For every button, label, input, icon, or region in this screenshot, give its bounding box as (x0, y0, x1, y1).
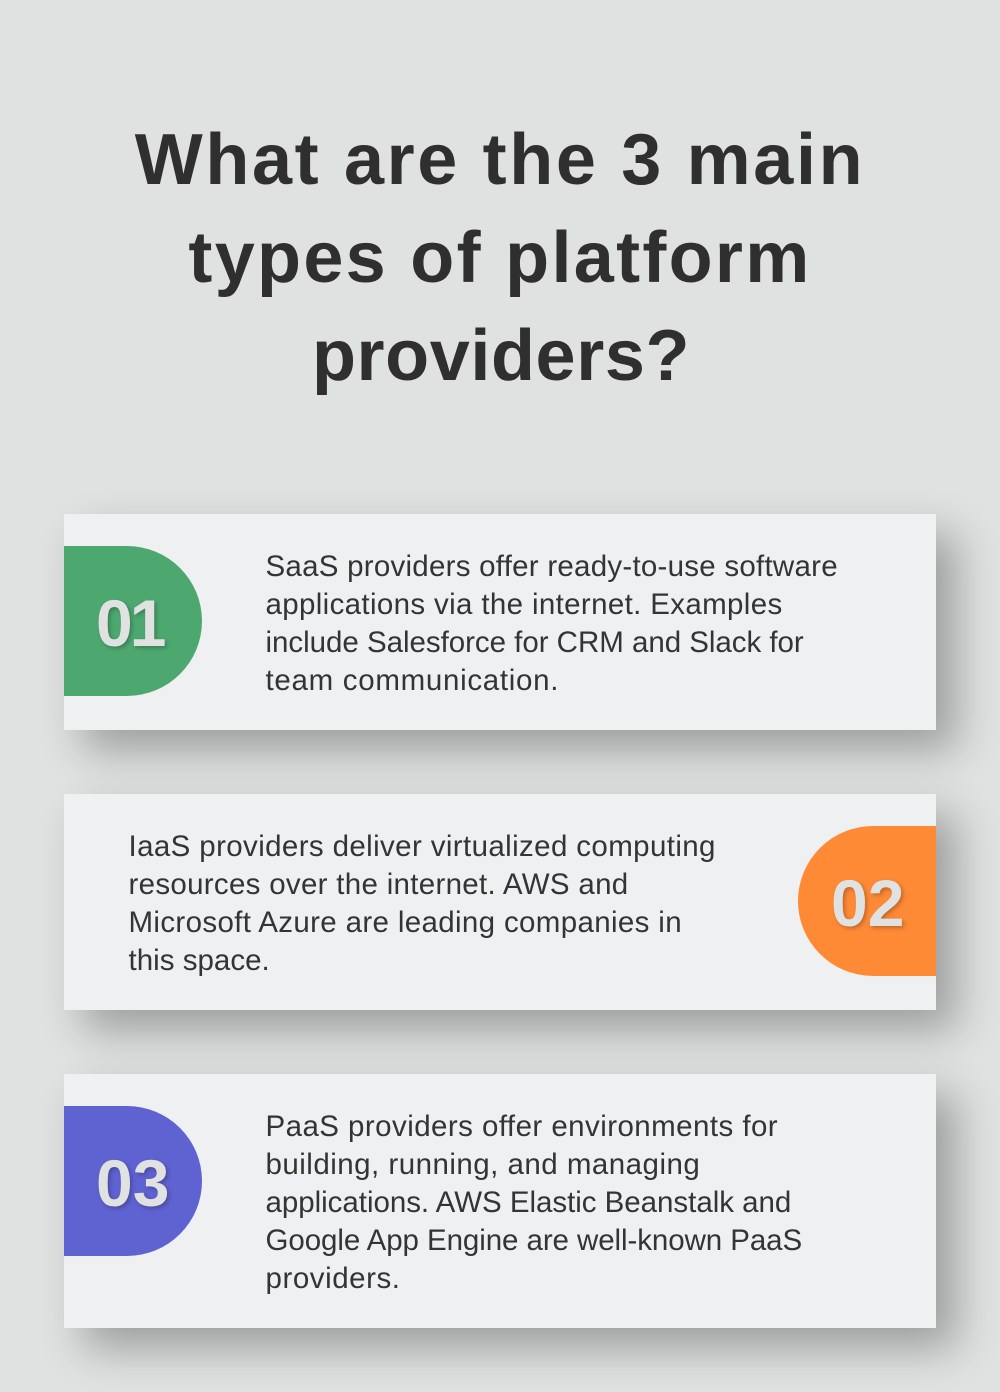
panel: card 03 PaaS (64, 1074, 936, 1328)
badge: 03: 03 (96, 1146, 169, 1220)
text: IaaS description: IaaS providers deliver virtualized computing (128, 830, 716, 863)
panel: card 01 SaaS (64, 514, 936, 730)
badge: 03 (64, 1106, 202, 1256)
text: PaaS description: providers. (266, 1262, 401, 1295)
title (134, 120, 865, 396)
text: SaaS description: SaaS providers offer ready-to-use software (266, 550, 838, 583)
text: IaaS description (128, 830, 716, 977)
text: IaaS description: Microsoft Azure are leading companies in (128, 906, 682, 939)
title: providers? (312, 316, 690, 396)
title: types of platform (188, 218, 812, 298)
text: SaaS description: team communication. (266, 664, 559, 697)
text: SaaS description: applications via the internet. Examples (266, 588, 783, 621)
text: SaaS description (266, 550, 838, 697)
badge: 02 (798, 826, 936, 976)
text: PaaS description: building, running, and managing (266, 1148, 700, 1181)
text: SaaS description: include Salesforce for CRM and Slack for (266, 626, 804, 659)
text: PaaS description: Google App Engine are well-known PaaS (266, 1224, 802, 1257)
panel: card 02 IaaS (64, 794, 936, 1010)
text: PaaS description (266, 1110, 802, 1295)
text: IaaS description: resources over the internet. AWS and (128, 868, 628, 901)
text: IaaS description: this space. (128, 944, 270, 977)
badge: 01: 01 (96, 586, 163, 660)
title: What are the 3 main (135, 120, 865, 200)
badge: 01 (64, 546, 202, 696)
badge: 02: 02 (831, 866, 904, 940)
text: PaaS description: PaaS providers offer environments for (266, 1110, 778, 1143)
text: PaaS description: applications. AWS Elastic Beanstalk and (266, 1186, 791, 1219)
